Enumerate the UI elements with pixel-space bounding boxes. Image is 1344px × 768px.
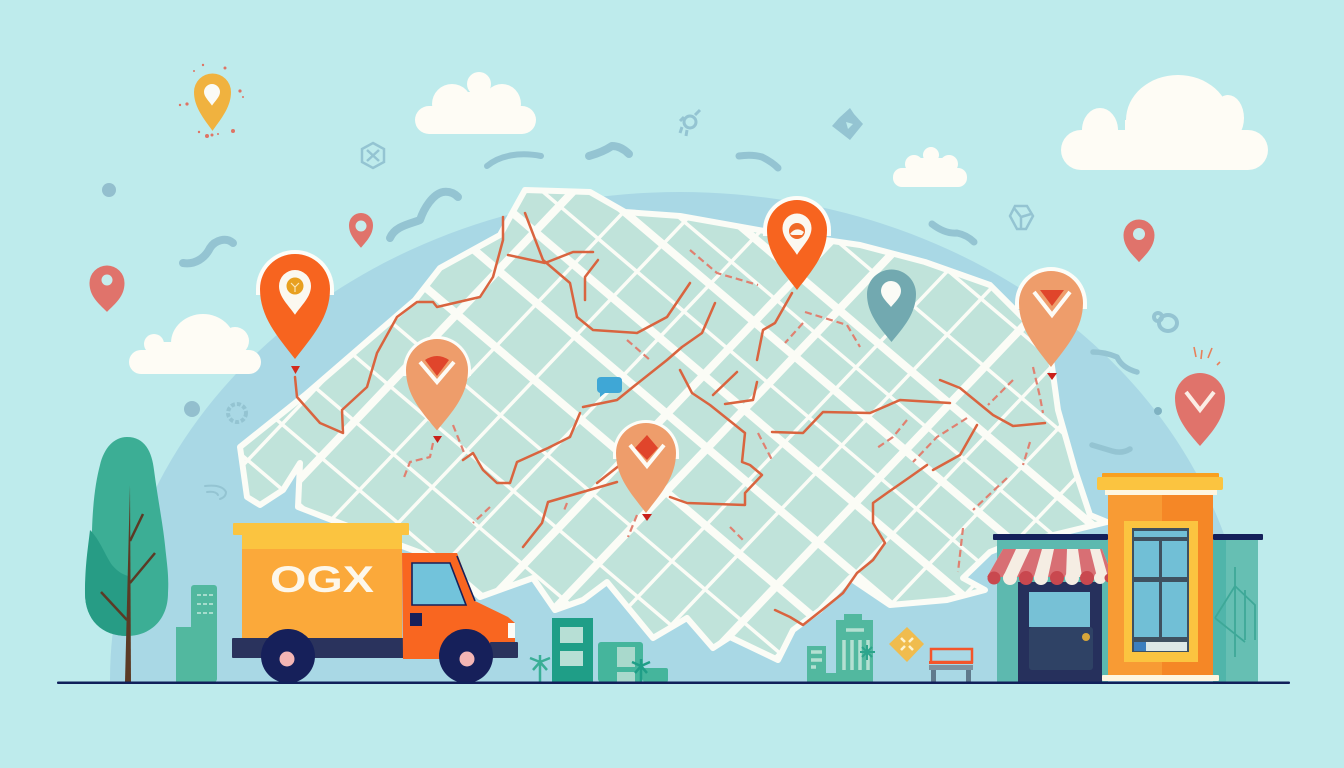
dot	[102, 183, 116, 197]
pin: large orange left	[256, 250, 334, 374]
pin: peach centre	[613, 420, 679, 521]
buildings: centre	[530, 618, 668, 682]
cloud: large right	[1061, 75, 1268, 170]
tower window	[1124, 521, 1198, 662]
storefront	[987, 473, 1263, 682]
pin: red right with chevron	[1175, 347, 1225, 446]
cloud: small right	[893, 147, 967, 187]
icon: ring of dots	[228, 404, 246, 422]
icon: clover	[1010, 206, 1033, 229]
orange tower	[1097, 473, 1223, 681]
pin: orange top	[763, 196, 831, 290]
decorative squiggles and small icons	[183, 146, 1137, 499]
wheel: front	[439, 629, 493, 683]
cloud: top centre	[415, 72, 536, 134]
buildings: right of map	[807, 614, 875, 682]
icon: tag	[832, 108, 863, 140]
awning	[987, 549, 1114, 585]
tree	[85, 437, 168, 682]
city map	[237, 187, 1108, 663]
delivery routes	[295, 213, 1045, 625]
icon: wall ornament	[1215, 567, 1255, 657]
globe dome	[110, 192, 1250, 683]
ground line	[57, 682, 1290, 684]
icon: speech bubble	[597, 377, 622, 397]
wheel: rear	[261, 629, 315, 683]
pin: small red upper right	[1124, 220, 1154, 262]
dot	[184, 401, 200, 417]
door	[1018, 582, 1102, 682]
icon: mouse shape	[1154, 313, 1177, 331]
cloud: left	[129, 314, 261, 374]
pin: peach right	[1015, 267, 1087, 380]
pin: teal	[867, 270, 916, 342]
dot	[1154, 407, 1162, 415]
pin: peach left	[403, 336, 471, 443]
illustration: delivery route map	[57, 64, 1290, 684]
sign: yellow diamond	[889, 627, 924, 662]
dashed routes	[403, 250, 1043, 572]
bench	[929, 649, 973, 682]
icon: hexagon	[362, 143, 384, 168]
building: left of truck	[176, 585, 217, 682]
icon: gear bug	[680, 110, 700, 136]
pin: small red centre-left	[349, 213, 373, 248]
pin: small red left	[90, 266, 124, 312]
truck logo: OGX	[270, 559, 374, 600]
delivery truck	[232, 523, 518, 683]
pin: gold top left	[179, 64, 244, 138]
